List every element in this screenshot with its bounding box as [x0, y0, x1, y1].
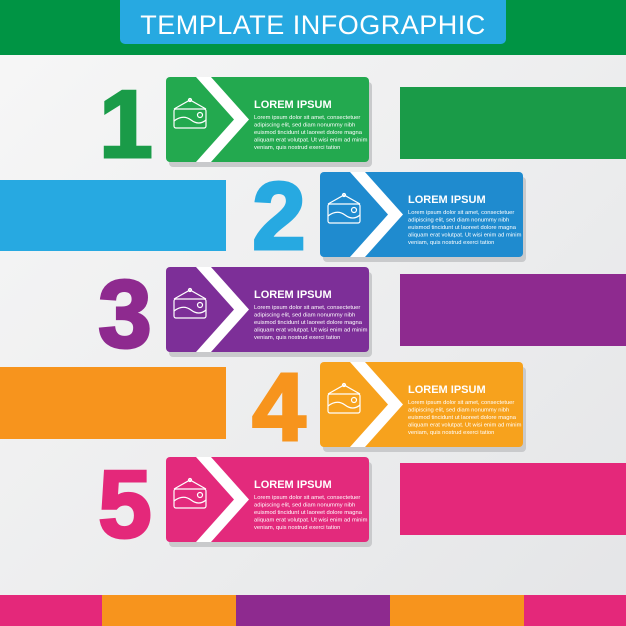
number 4: 4: [252, 354, 306, 461]
title: [120, 0, 506, 44]
step 3: [98, 261, 626, 368]
bar 3: [400, 274, 626, 346]
title: TEMPLATE INFOGRAPHIC: [140, 10, 486, 40]
step 4: [0, 354, 526, 461]
number 2: 2: [252, 163, 306, 270]
card 4: [320, 362, 526, 452]
bar 5: [400, 463, 626, 535]
card 3: [166, 267, 372, 357]
number 3: 3: [98, 261, 152, 368]
number 5: 5: [98, 451, 152, 558]
bar 4: [0, 367, 226, 439]
header band: [0, 0, 626, 55]
card 1: [166, 77, 372, 167]
bar 2: [0, 180, 226, 251]
card 5: [166, 457, 372, 547]
number 1: 1: [99, 71, 153, 178]
step 1: [99, 71, 626, 178]
step 2: [0, 163, 526, 270]
step 5: [98, 451, 626, 558]
bottom color strip: [0, 595, 626, 626]
bar 1: [400, 87, 626, 159]
card 2: [320, 172, 526, 262]
